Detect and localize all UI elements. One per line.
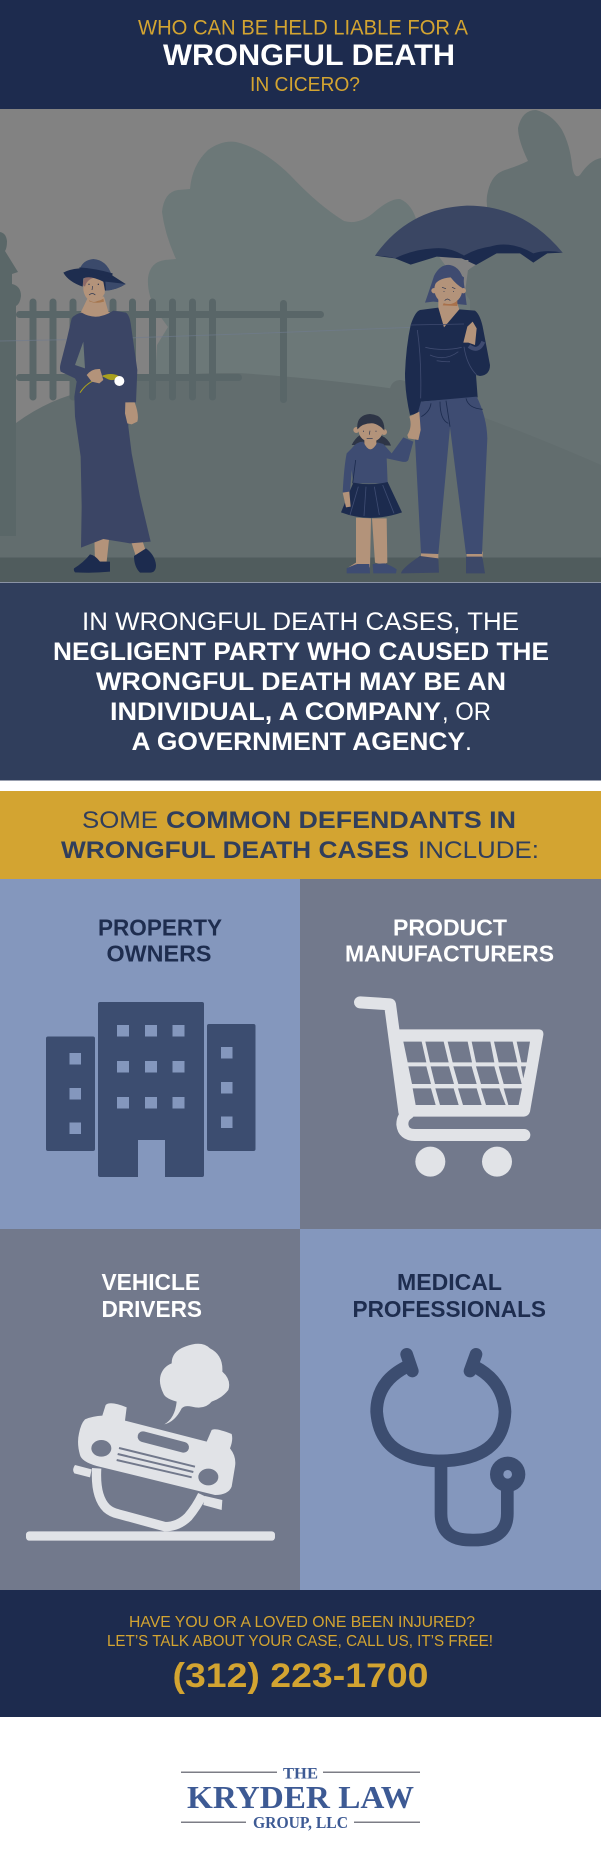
umbrella handle <box>469 342 483 349</box>
ankles <box>421 552 483 559</box>
face <box>434 275 462 304</box>
background tree left <box>148 142 470 460</box>
head <box>83 277 105 302</box>
statement line 5: A GOVERNMENT AGENCY <box>132 728 465 756</box>
faint rain line <box>0 327 420 341</box>
banner word: include: INCLUDE: <box>418 837 539 864</box>
statement line 4: INDIVIDUAL, A COMPANY <box>110 698 441 726</box>
icon: stethoscope <box>377 1354 525 1540</box>
label: medical professionals <box>352 1269 546 1322</box>
child lower hand <box>343 492 351 507</box>
label: medical professionals: MEDICAL <box>397 1269 502 1295</box>
ears <box>431 288 437 293</box>
label: vehicle drivers: DRIVERS <box>102 1296 202 1322</box>
child arm line <box>353 460 356 483</box>
arm gap <box>75 342 85 368</box>
child shoes <box>347 563 397 573</box>
label: medical professionals: PROFESSIONALS <box>352 1296 546 1322</box>
figure: woman with umbrella and child <box>341 206 563 573</box>
label: product manufacturers: MANUFACTURERS <box>345 940 554 966</box>
label: vehicle drivers <box>102 1269 202 1322</box>
panel: negligent party statement <box>0 582 601 780</box>
heading line: who can be held liable: WHO CAN BE HELD LIABLE FOR A <box>138 16 468 40</box>
lower hand <box>125 402 138 424</box>
hair <box>425 265 467 305</box>
facial features <box>442 287 455 301</box>
neck shadow <box>443 301 457 306</box>
phone number: (312) 223-1700 <box>172 1657 428 1695</box>
child hair <box>357 414 384 431</box>
sweater <box>405 308 490 415</box>
label: property owners: OWNERS <box>106 940 212 966</box>
statement line 3: WRONGFUL DEATH MAY BE AN <box>96 668 506 696</box>
hat brim <box>63 268 126 291</box>
panel: header title <box>0 0 601 109</box>
child legs <box>348 518 395 568</box>
skirt pleats <box>350 485 394 516</box>
holding hand <box>87 369 103 383</box>
ear right <box>461 288 466 293</box>
call line 2: LET’S TALK ABOUT YOUR CASE, CALL US, IT’S FREE! <box>107 1633 493 1650</box>
banner bold line 2: WRONGFUL DEATH CASES <box>61 837 409 864</box>
bangs <box>433 270 464 289</box>
label: property owners: PROPERTY <box>98 914 222 940</box>
hat band <box>79 267 113 278</box>
illustration: mourning family in the rain <box>0 109 601 583</box>
icon: overturned car with smoke <box>26 1344 275 1541</box>
dress <box>60 311 151 548</box>
figure: woman with hat and flower <box>60 259 156 573</box>
divider highlight <box>0 582 601 583</box>
panel: product manufacturers <box>300 879 601 1229</box>
umbrella canopy <box>375 206 563 258</box>
logo word: kryder law: KRYDER LAW <box>187 1779 414 1815</box>
panel: property owners <box>0 879 300 1229</box>
statement line 4 end: , OR <box>442 698 491 726</box>
white flower <box>114 376 124 386</box>
child head <box>359 419 383 442</box>
banner word: some: SOME <box>82 807 158 834</box>
shoes <box>401 556 485 573</box>
label: product manufacturers <box>345 914 554 966</box>
hill <box>0 373 601 560</box>
panel: call to action <box>0 1590 601 1717</box>
street <box>0 558 601 582</box>
heading line: wrongful death: WRONGFUL DEATH <box>163 39 455 72</box>
child face <box>363 431 376 439</box>
banner bold line 1: COMMON DEFENDANTS IN <box>166 807 516 834</box>
gate pillar <box>0 232 21 536</box>
heading line: in Cicero: IN CICERO? <box>250 73 360 96</box>
neck <box>80 297 115 320</box>
flower stem and leaf <box>80 379 97 393</box>
child neck <box>364 438 377 452</box>
hat crown <box>80 259 112 275</box>
jeans <box>415 397 487 554</box>
shoes <box>74 548 156 573</box>
logo word: group llc: GROUP, LLC <box>253 1813 348 1832</box>
sky sliver <box>448 260 469 270</box>
panel: common defendants banner <box>0 791 601 879</box>
statement line 1: IN WRONGFUL DEATH CASES, THE <box>82 608 519 636</box>
woman hand holding child <box>407 412 421 440</box>
label: product manufacturers: PRODUCT <box>393 914 508 940</box>
neck <box>438 297 459 328</box>
panel: vehicle drivers <box>0 1229 300 1590</box>
call line 1: HAVE YOU OR A LOVED ONE BEEN INJURED? <box>129 1614 475 1631</box>
child sweater <box>343 437 413 493</box>
hair <box>83 273 95 287</box>
icon: office buildings <box>46 1002 256 1177</box>
background tree right <box>440 110 601 480</box>
child ears <box>353 427 387 435</box>
umbrella hand <box>463 322 477 345</box>
hill bump <box>390 380 410 400</box>
sweater folds <box>411 324 477 398</box>
jeans seams <box>421 398 483 427</box>
panel: medical professionals <box>300 1229 601 1590</box>
statement line 5 period: . <box>465 728 472 756</box>
face details <box>89 284 99 295</box>
logo word: the: THE <box>283 1766 318 1782</box>
label: vehicle drivers: VEHICLE <box>102 1269 200 1295</box>
legs <box>94 537 146 562</box>
logo: The Kryder Law Group <box>181 1766 420 1832</box>
statement line 2: NEGLIGENT PARTY WHO CAUSED THE <box>53 638 549 666</box>
label: property owners <box>98 914 222 966</box>
child skirt <box>341 482 402 518</box>
neck shadow <box>89 299 104 303</box>
icon: shopping cart <box>360 1002 543 1177</box>
child hair back <box>352 435 391 446</box>
hat brim right <box>105 282 126 291</box>
umbrella underside <box>375 233 563 265</box>
fence <box>16 298 324 403</box>
